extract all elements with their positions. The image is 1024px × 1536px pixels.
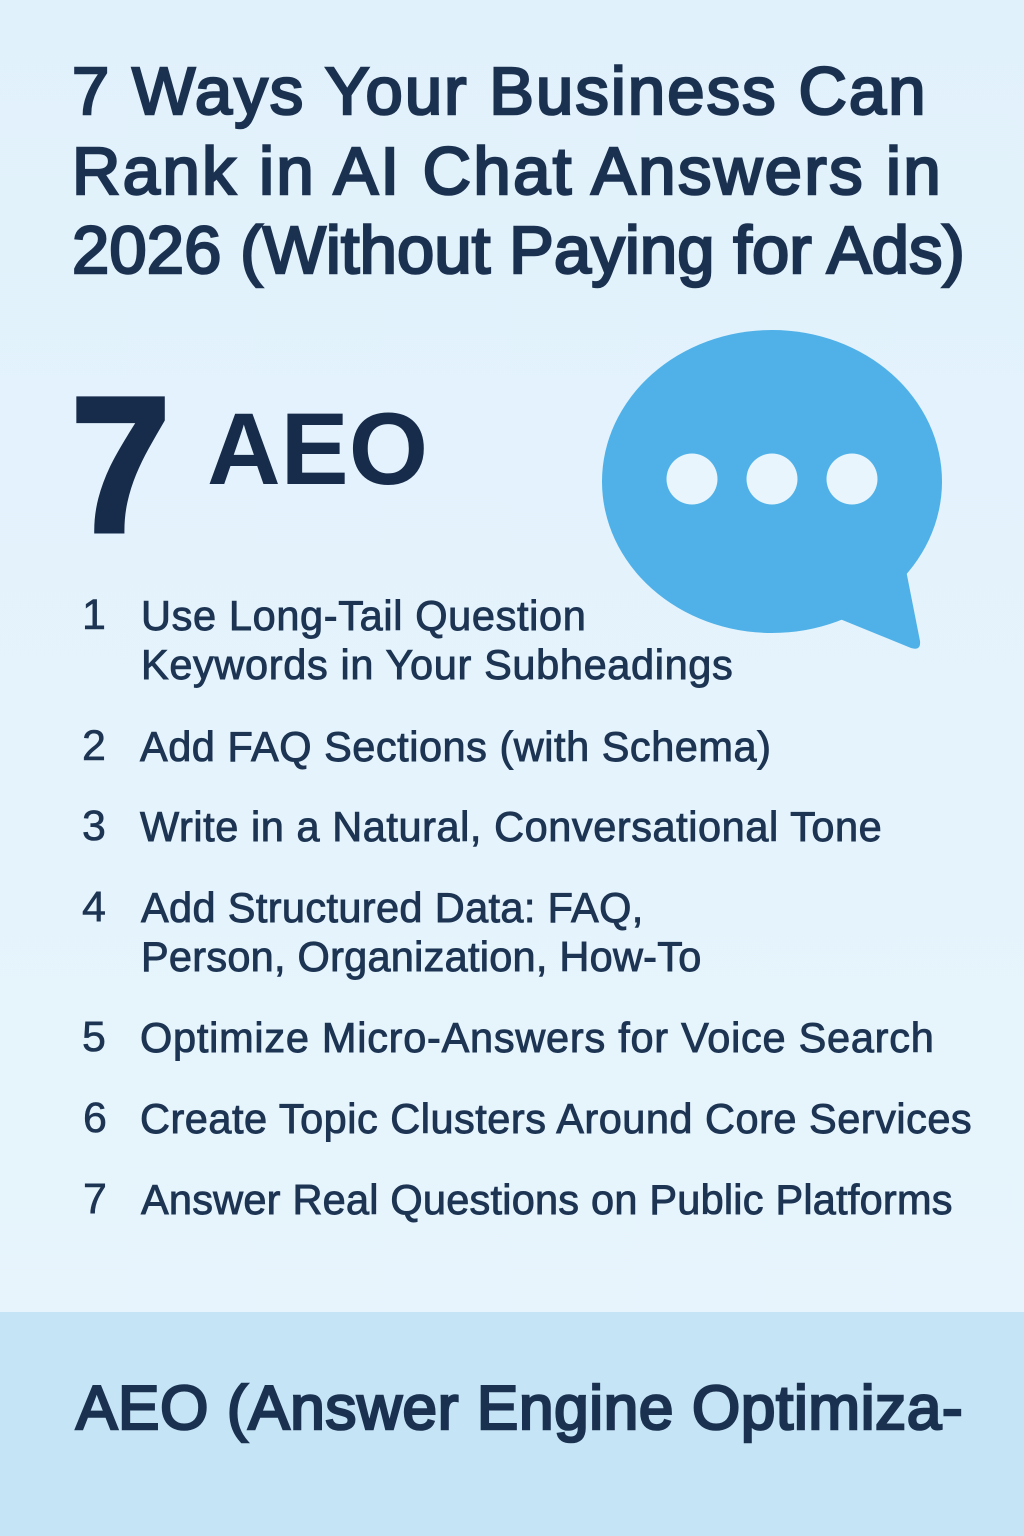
item 7: 7	[83, 1175, 107, 1223]
icon: chat speech bubble	[602, 330, 942, 649]
footer band	[0, 1312, 1024, 1536]
item 6: Create Topic Clusters Around Core Services	[140, 1095, 972, 1142]
item 2: Add FAQ Sections (with Schema)	[140, 723, 771, 770]
item 4	[82, 883, 702, 980]
item 3: 3	[82, 802, 106, 850]
item 5: 5	[82, 1013, 106, 1061]
item 3: Write in a Natural, Conversational Tone	[140, 803, 882, 850]
item 7: Answer Real Questions on Public Platforms	[141, 1176, 953, 1223]
title	[72, 54, 965, 288]
list of 7 ways	[82, 591, 972, 1223]
item 1: Keywords in Your Subheadings	[141, 641, 733, 688]
item 1: Use Long-Tail Question	[141, 592, 586, 639]
item 4: 4	[82, 883, 106, 931]
item 6: 6	[83, 1094, 107, 1142]
title: 2026 (Without Paying for Ads)	[72, 213, 965, 288]
item 5: Optimize Micro-Answers for Voice Search	[140, 1014, 935, 1061]
item 1: 1	[82, 591, 106, 639]
item 1	[82, 591, 733, 688]
title: 7 Ways Your Business Can	[72, 54, 928, 129]
title: Rank in AI Chat Answers in	[72, 134, 943, 209]
footer text: AEO (Answer Engine Optimiza-	[76, 1374, 963, 1443]
big number 7: 7	[70, 357, 170, 572]
item 4: Add Structured Data: FAQ,	[141, 884, 644, 931]
item 2: 2	[82, 722, 106, 770]
item 4: Person, Organization, How-To	[141, 933, 702, 980]
AEO heading: AEO	[207, 392, 428, 506]
